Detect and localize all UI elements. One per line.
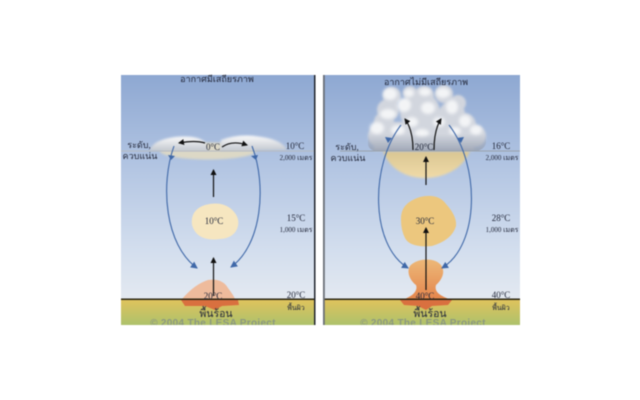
arrow: cloud spread right (222, 143, 247, 147)
credit: stable: © 2004 The LESA Project (150, 318, 276, 329)
hot ground patch: unstable (400, 300, 452, 310)
heading: stable air: อากาศมีเสถียรภาพ (180, 74, 254, 84)
label: cloud temp 20C: 20°C (415, 142, 433, 152)
label: condensation level line 2, stable: ควบแน่น (123, 151, 157, 161)
ground line: stable (121, 298, 314, 300)
panel divider right (323, 75, 325, 325)
arrow: cloud rise left (405, 119, 413, 150)
arrowhead: mid left, unstable (385, 137, 392, 143)
label: surface, stable: พื้นผิว (287, 301, 305, 312)
cloud level line: stable (121, 150, 314, 152)
arrow: rising air lower, stable (212, 258, 214, 296)
arrowhead: mid right, unstable (457, 137, 464, 143)
arrow: rising air lower, unstable (425, 228, 427, 290)
ground line: unstable (324, 298, 520, 300)
arrow: rising air upper, unstable (425, 157, 427, 185)
label: cloud temp 0C: 0°C (206, 142, 220, 152)
label: 2000 m, unstable: 2,000 เมตร (486, 154, 519, 162)
label: hot ground, stable: พื้นร้อน (199, 306, 233, 320)
air bubble: 30C (401, 196, 456, 246)
panel divider left (314, 75, 316, 325)
arrowhead: mid left, stable (168, 155, 175, 160)
label: surface 20C: 20°C (287, 290, 305, 300)
hot ground patch: stable (181, 300, 239, 310)
label: condensation level, stable: ระดับ, (127, 140, 151, 150)
tan dome below cloud (383, 151, 470, 178)
cloud base tan: stable (160, 142, 256, 160)
label: 28C at 1000 m: 28°C (492, 213, 510, 223)
label: 10C at 2000 m: 10°C (286, 141, 304, 151)
arrow: rising air upper, stable (212, 170, 214, 197)
label: 1000 m, unstable: 1,000 เมตร (486, 226, 519, 234)
label: condensation level line 2, unstable: ควบแน่น (331, 153, 365, 163)
ground: unstable (324, 299, 520, 325)
arrow: sinking air right, stable (231, 146, 260, 267)
label: bubble 30C: 30°C (416, 216, 434, 226)
cloud level line: unstable (340, 150, 520, 152)
arrow: cloud rise right (434, 119, 441, 150)
hot mushroom bubble (402, 260, 452, 300)
label: 2000 m, stable: 2,000 เมตร (280, 154, 313, 162)
label: bubble 20C: 20°C (204, 291, 222, 301)
arrow: cloud spread left (179, 142, 205, 143)
arrowhead: mid right, stable (251, 155, 258, 160)
cumulus cloud (368, 85, 486, 151)
arrow: sinking air left, stable (167, 146, 197, 268)
label: 15C at 1000 m: 15°C (287, 213, 305, 223)
label: 1000 m, stable: 1,000 เมตร (280, 226, 313, 234)
flat cloud (150, 136, 287, 151)
cloud highlights (370, 88, 482, 137)
arrow: sinking air left, unstable (379, 125, 408, 268)
credit: unstable: © 2004 The LESA Project (360, 318, 486, 329)
white margin below panels (0, 325, 640, 400)
air bubble: 10C (192, 204, 238, 239)
label: bubble 40C: 40°C (416, 291, 434, 301)
label: hot ground, unstable: พื้นร้อน (413, 306, 447, 320)
panel: unstable air (324, 75, 520, 329)
label: 16C at 2000 m: 16°C (492, 141, 510, 151)
hot bubble: stable (182, 280, 235, 299)
label: bubble 10C: 10°C (205, 216, 223, 226)
arrow: sinking air right, unstable (442, 125, 471, 268)
panel: stable air (121, 74, 314, 329)
label: surface 40C: 40°C (492, 290, 510, 300)
cloud base shading (368, 134, 486, 151)
cloud body (368, 85, 486, 151)
label: surface, unstable: พื้นผิว (492, 301, 510, 312)
label: condensation level, unstable: ระดับ, (335, 142, 359, 152)
heading: unstable air: อากาศไม่มีเสถียรภาพ (384, 77, 468, 87)
ground: stable (121, 299, 314, 325)
